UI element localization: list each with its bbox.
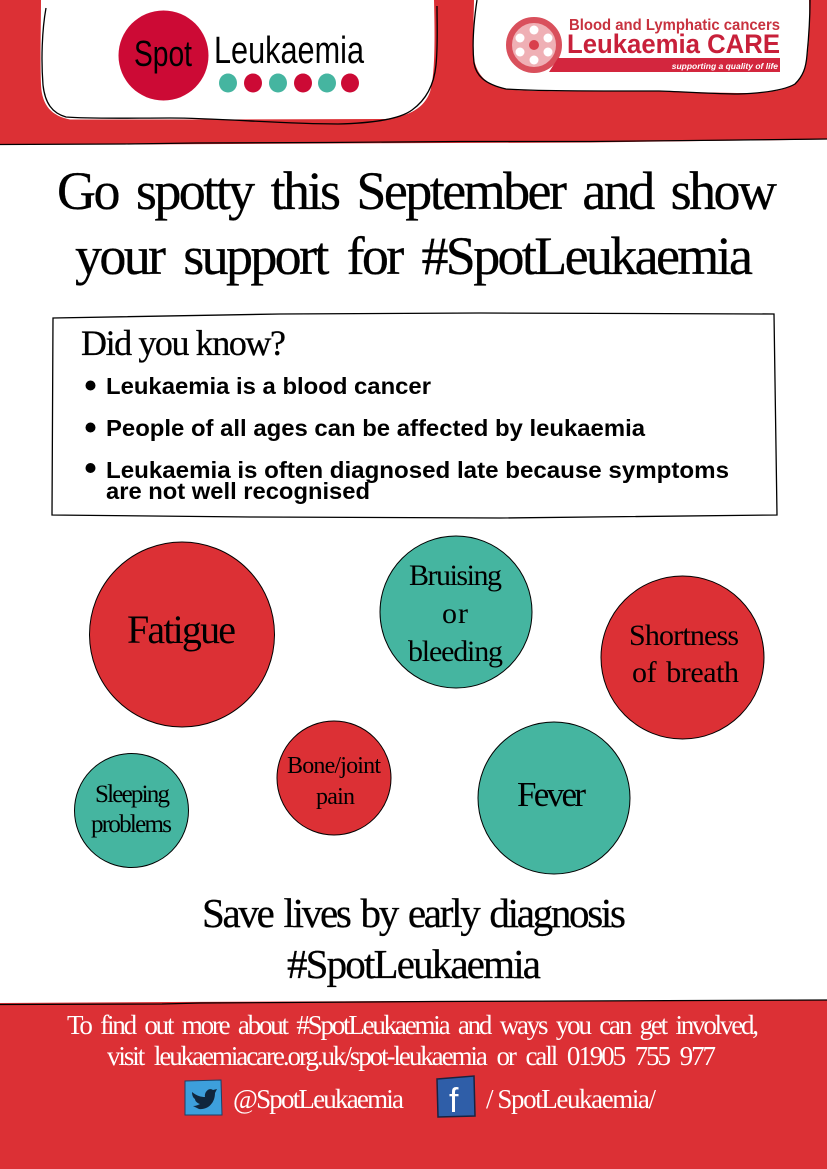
icon: twitter: [185, 1080, 222, 1115]
logo: Leukaemia CARE wordmark: Leukaemia CARE: [567, 29, 780, 59]
title: your support for #SpotLeukaemia: [75, 226, 753, 286]
call to action: Save lives by early diagnosis: [202, 890, 626, 936]
circle: fever: [478, 722, 630, 874]
circle: shortness of breath: Shortness: [629, 619, 739, 652]
logo: wordmark: Leukaemia: [214, 30, 365, 72]
footer band: [0, 1000, 827, 1169]
panel: did you know: [52, 313, 777, 518]
circle: bruising or bleeding: bleeding: [408, 635, 503, 668]
circle: fatigue: Fatigue: [127, 607, 236, 652]
circle: bone or joint pain: pain: [316, 784, 355, 810]
footer text: To find out more about #SpotLeukaemia and ways you can get involved,: [67, 1010, 759, 1040]
circle: sleeping problems: Sleeping: [95, 781, 170, 808]
circle: bruising or bleeding: or: [442, 597, 468, 630]
bullet list: Leukaemia is often diagnosed late because symptoms: [106, 457, 729, 483]
bullet list: [86, 373, 729, 504]
circle: fatigue: [90, 542, 274, 727]
footer text: [67, 1010, 759, 1071]
twitter handle: @SpotLeukaemia: [233, 1084, 404, 1114]
icon: facebook: [437, 1076, 475, 1120]
footer text: visit leukaemiacare.org.uk/spot-leukaemia or call 01905 755 977: [107, 1041, 716, 1071]
circle: bruising or bleeding: [380, 536, 532, 688]
title: Go spotty this September and show: [57, 161, 777, 221]
call to action: [202, 890, 626, 987]
logo: red spot: [118, 10, 208, 100]
heading: did you know: Did you know?: [81, 323, 286, 363]
logo: strapline bar: supporting a quality of life: [672, 61, 778, 71]
title: [57, 161, 777, 286]
bullet list: are not well recognised: [106, 478, 370, 504]
call to action: #SpotLeukaemia: [287, 941, 541, 987]
bullet list: People of all ages can be affected by leukaemia: [106, 415, 645, 441]
circle: sleeping problems: [74, 754, 188, 868]
circle: bruising or bleeding: Bruising: [409, 559, 502, 592]
logo: row of dots: [219, 74, 359, 92]
logo: red spot: Spot: [134, 33, 192, 74]
bullet list: Leukaemia is a blood cancer: [106, 373, 431, 399]
circle: fever: Fever: [517, 775, 586, 814]
panel: Leukaemia CARE logo: [473, 0, 810, 94]
circle: bone or joint pain: Bone/joint: [287, 753, 381, 779]
circle: shortness of breath: [601, 576, 764, 739]
icon: facebook: f: [449, 1082, 459, 1120]
logo: strapline bar: [549, 58, 780, 72]
circle: shortness of breath: of breath: [632, 656, 739, 689]
circle: bone or joint pain: [277, 721, 391, 835]
header band: [0, 0, 827, 144]
circle: sleeping problems: problems: [91, 811, 172, 838]
logo: roundel: [509, 20, 559, 70]
logo: tagline heading: Blood and Lymphatic cancers: [569, 17, 780, 34]
panel: Spot Leukaemia logo: [41, 0, 437, 124]
facebook handle: / SpotLeukaemia/: [486, 1084, 656, 1114]
